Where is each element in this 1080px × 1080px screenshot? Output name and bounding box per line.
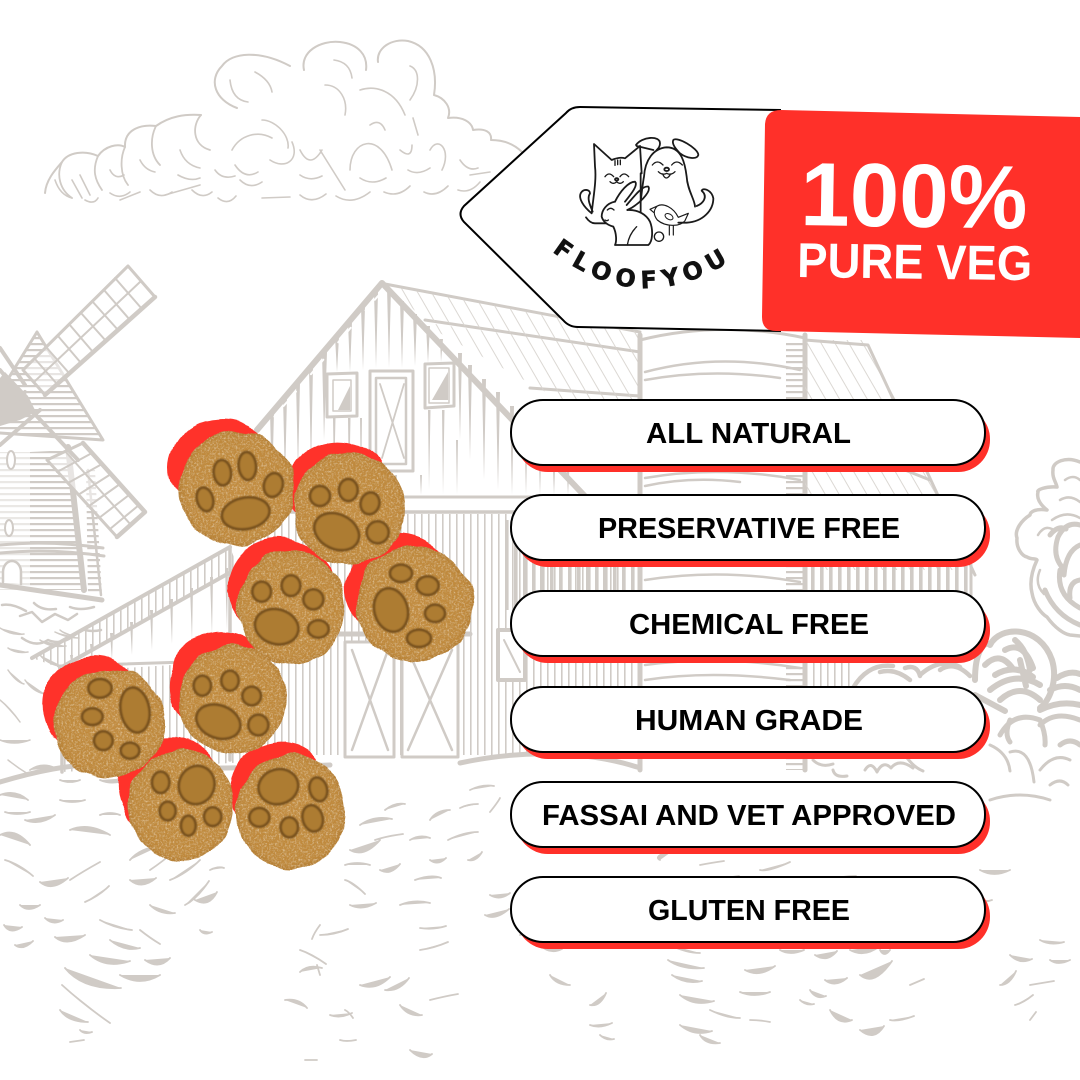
pill: human grade: [511, 687, 990, 759]
barn doors: [335, 634, 470, 757]
tag shape: [460, 107, 780, 331]
pill: all natural: ALL NATURAL: [646, 418, 851, 450]
sail hub: [0, 372, 36, 426]
paw-print biscuits: [54, 431, 474, 869]
pill: gluten free: [511, 877, 990, 949]
pill: preservative free: PRESERVATIVE FREE: [598, 513, 900, 545]
windmill tower: [30, 450, 86, 590]
biscuit 6: [54, 669, 165, 778]
subheading pure veg: PURE VEG: [797, 234, 1033, 291]
gable siding: [270, 288, 570, 495]
pill: chemical free: [511, 591, 990, 663]
lower sail: [47, 443, 145, 537]
cloud: [45, 40, 522, 202]
badge shape: [762, 110, 1080, 338]
logo: cat, dog, rabbit and bird: [580, 138, 713, 245]
barn windows and upper door: [327, 363, 454, 471]
silo and right barn: [640, 329, 975, 770]
windmill roof: [0, 332, 103, 440]
headline 100%: 100%: [800, 145, 1028, 249]
windmill: [0, 266, 155, 600]
pill: fassai and vet approved: FASSAI AND VET APPROVED: [542, 800, 956, 832]
feature list: [511, 400, 990, 949]
biscuit 7: [129, 751, 234, 861]
tag panel with logo: [459, 106, 781, 332]
pill: chemical free: CHEMICAL FREE: [629, 609, 869, 641]
biscuit 1: [179, 431, 294, 546]
biscuit 3: [238, 550, 346, 665]
pill: human grade: HUMAN GRADE: [635, 705, 863, 737]
biscuit 8: [236, 754, 345, 869]
red badge: 100% pure veg: [762, 110, 1080, 338]
biscuit 2: [293, 453, 405, 565]
biscuit 5: [179, 645, 287, 753]
pill: preservative free: [511, 495, 990, 567]
barn: [0, 283, 640, 782]
upper sail: [23, 266, 155, 395]
tree at right edge: [1016, 460, 1080, 636]
red blobs behind biscuits: [43, 419, 454, 842]
large bush: [813, 631, 1080, 800]
pill: gluten free: GLUTEN FREE: [648, 895, 850, 927]
biscuit 4: [356, 546, 474, 662]
hill under windmill: [0, 603, 101, 774]
pill: fassai and vet approved: [511, 782, 990, 854]
brand name: FLOOFYOU: [553, 238, 724, 289]
pill: all natural: [511, 400, 990, 472]
ground furrows: [0, 765, 1070, 1060]
